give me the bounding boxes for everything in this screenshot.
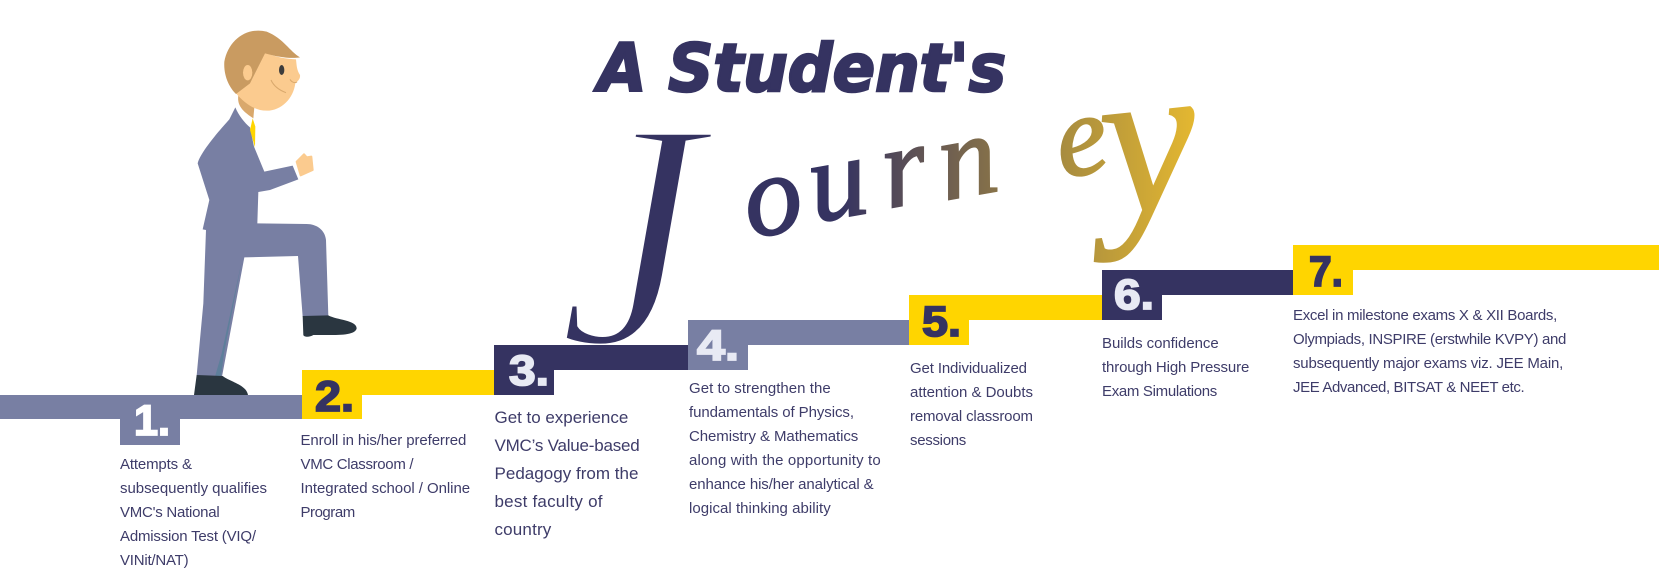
description: Pedagogy from the [494,464,638,483]
title: Journey script word: J [558,55,715,415]
description: Olympiads, INSPIRE (erstwhile KVPY) and [1293,331,1566,348]
description: removal classroom [910,408,1033,425]
step bar [688,320,909,370]
step bar [0,395,302,445]
step bar [909,295,1102,345]
description: logical thinking ability [689,500,831,517]
step 3 [494,345,688,539]
description: sessions [910,432,966,449]
number 5: 5. [922,298,961,346]
step 2 [300,370,494,521]
ear [243,65,252,80]
description: VINit/NAT) [120,552,189,569]
description: attention & Doubts [910,384,1033,401]
description: Attempts & [120,456,192,473]
number 2: 2. [315,373,354,421]
description: Admission Test (VIQ/ [120,528,257,545]
tie [250,118,255,147]
description: Excel in milestone exams X & XII Boards, [1293,307,1557,324]
hand [297,154,313,175]
description: Get to experience [494,408,628,427]
title: A Student's: A Student's [593,30,1006,107]
description: country [494,520,552,539]
description: VMC Classroom / [300,456,414,473]
number 4: 4. [697,322,739,370]
description: Chemistry & Mathematics [689,428,858,445]
step 4 [688,320,909,517]
description [120,456,267,569]
description: subsequently major exams viz. JEE Main, [1293,355,1563,372]
number 3: 3. [509,347,549,395]
description: Get to strengthen the [689,380,831,397]
title: Journey script word: ourne [732,69,1117,263]
step 5 [909,295,1102,449]
step 6 [1102,270,1293,400]
description: subsequently qualifies [120,480,267,497]
description: Enroll in his/her preferred [300,432,466,449]
left shoe [194,375,248,395]
description [910,360,1033,449]
description [494,408,640,539]
description: Get Individualized [910,360,1027,377]
step 7 [1293,245,1659,396]
step bar [1293,245,1659,295]
description: VMC's National [120,504,220,521]
step bar [302,370,494,419]
description [689,380,881,517]
eye [279,65,284,75]
step 1 [0,395,302,569]
number 1: 1. [134,397,170,445]
face [236,53,300,111]
description: Exam Simulations [1102,383,1217,400]
step bar [1102,270,1293,320]
description: best faculty of [494,492,603,511]
title: Journey script word: y [1070,14,1208,264]
description: fundamentals of Physics, [689,404,854,421]
number 6: 6. [1114,271,1154,319]
description: Program [300,504,355,521]
description: through High Pressure [1102,359,1249,376]
description [300,432,470,521]
hair [224,31,300,94]
number 7: 7. [1309,248,1343,296]
neck [238,95,254,118]
description [1293,307,1566,396]
description: along with the opportunity to [689,452,881,469]
step bar [494,345,688,395]
description: VMC’s Value-based [494,436,640,455]
trouser stripe [215,262,242,377]
description: JEE Advanced, BITSAT & NEET etc. [1293,379,1525,396]
illustration: man climbing steps [194,31,357,395]
smile [271,79,297,93]
right shoe [303,315,357,337]
description: Integrated school / Online [300,480,470,497]
description: enhance his/her analytical & [689,476,874,493]
description: Builds confidence [1102,335,1219,352]
description [1102,335,1249,400]
suit [197,107,328,377]
